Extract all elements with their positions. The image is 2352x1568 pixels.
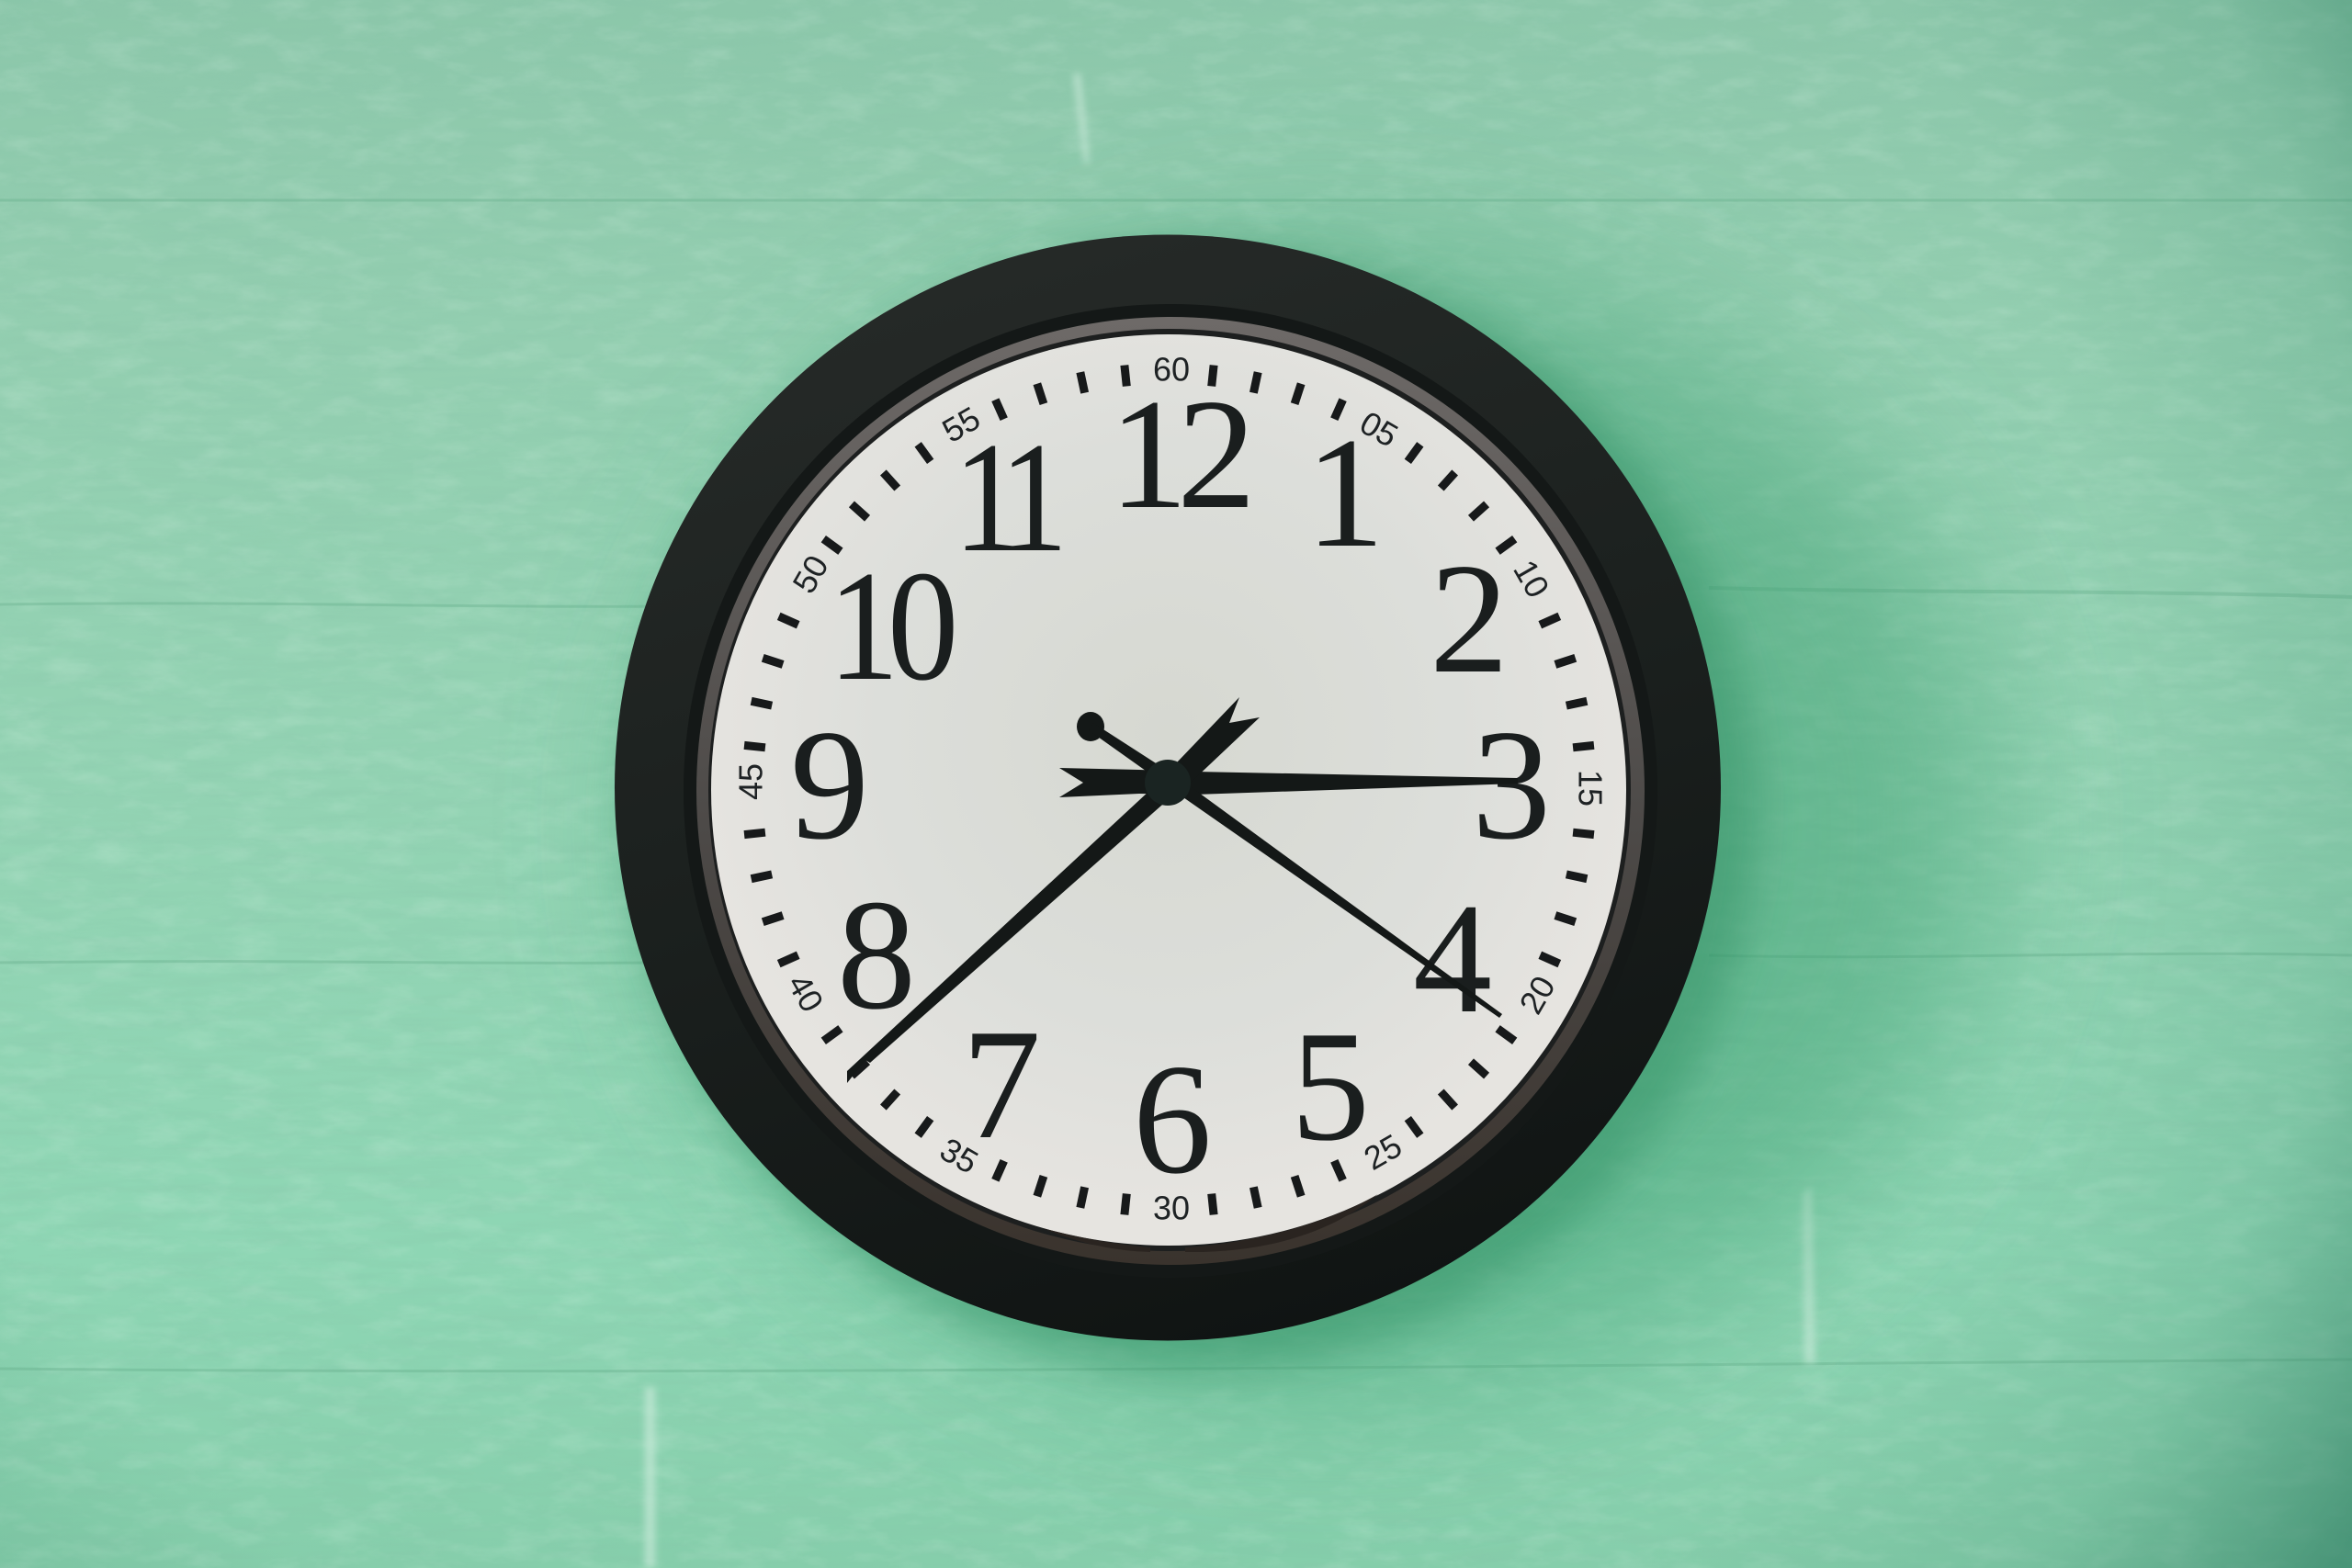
hour numerals xyxy=(790,367,1551,1207)
grey metal bezel xyxy=(696,317,1645,1265)
minute labels: 25 xyxy=(1357,1126,1408,1178)
hour numerals: 1 xyxy=(1306,406,1385,581)
minute hand xyxy=(847,697,1260,1083)
bottom rim crescent xyxy=(1043,1194,1378,1252)
clock xyxy=(615,235,1721,1341)
hour numerals: 12 xyxy=(1109,367,1248,542)
minute labels: 05 xyxy=(1353,403,1405,455)
hour numerals: 5 xyxy=(1291,999,1370,1174)
minute labels: 15 xyxy=(1571,770,1609,807)
minute labels: 35 xyxy=(933,1130,985,1181)
hour numerals: 7 xyxy=(962,998,1041,1172)
hour numerals: 2 xyxy=(1430,532,1509,706)
minute labels: 50 xyxy=(785,548,836,600)
hour numerals: 9 xyxy=(790,698,869,873)
minute labels: 40 xyxy=(780,967,831,1019)
outer black frame xyxy=(615,235,1721,1341)
hour numerals: 6 xyxy=(1133,1032,1212,1207)
minute ticks xyxy=(744,365,1594,1215)
minute labels: 45 xyxy=(732,763,770,800)
minute labels: 55 xyxy=(935,399,987,450)
hour numerals: 3 xyxy=(1472,698,1551,873)
minute labels: 10 xyxy=(1506,553,1557,604)
second hand xyxy=(1077,712,1502,1018)
minute labels: 30 xyxy=(1153,1190,1190,1227)
hour numerals: 10 xyxy=(828,539,954,714)
hour numerals: 11 xyxy=(954,410,1060,585)
minute labels: 60 xyxy=(1153,351,1190,389)
hour hand xyxy=(1059,768,1518,797)
centre hub xyxy=(1145,760,1191,806)
hour numerals: 4 xyxy=(1413,872,1492,1046)
clock drop shadow on wall xyxy=(632,246,1994,1396)
hour numerals: 8 xyxy=(837,868,916,1043)
minute labels: 20 xyxy=(1511,969,1563,1021)
white clock face xyxy=(711,334,1626,1246)
inner frame step xyxy=(684,304,1657,1278)
minute labels xyxy=(732,351,1609,1227)
